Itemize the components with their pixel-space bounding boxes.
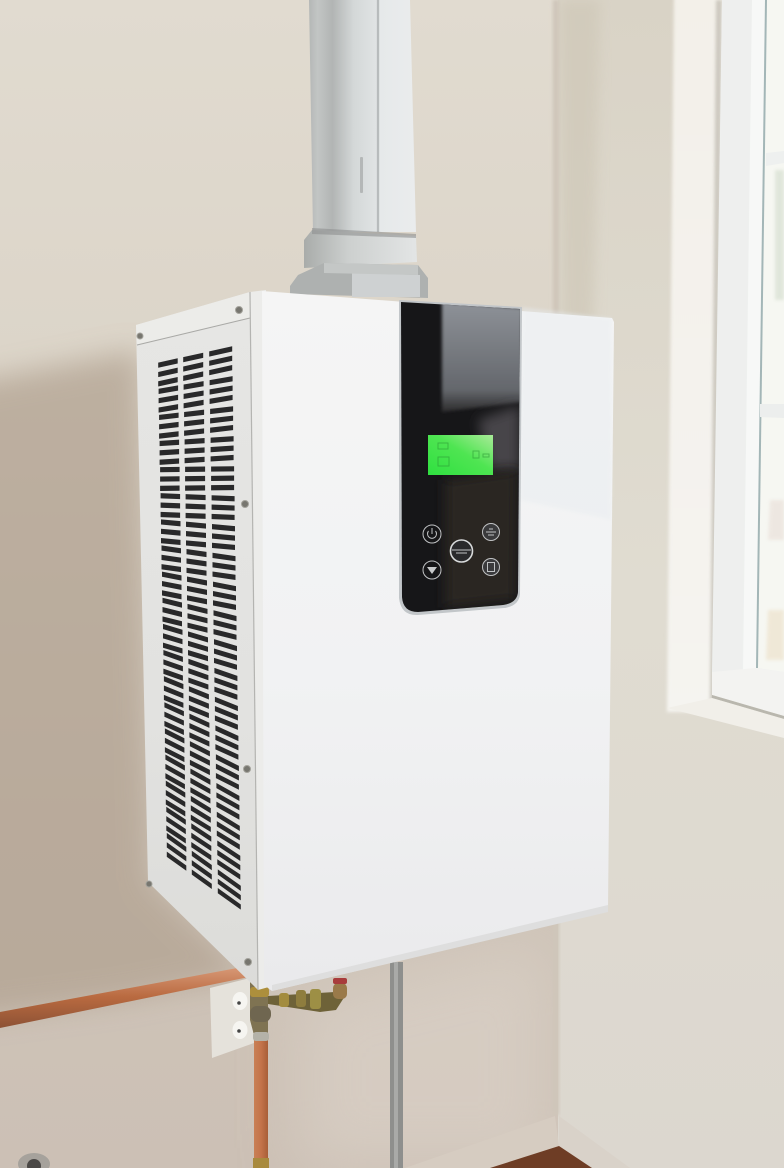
flue pipe (290, 0, 428, 298)
top strip of side panel (136, 292, 250, 345)
button: mode (482, 558, 500, 576)
window glass (757, 0, 784, 672)
LCD screen (428, 435, 493, 475)
button: power (423, 525, 441, 543)
button: centre (450, 540, 472, 562)
brass fittings (250, 976, 347, 1041)
vent slots (168, 349, 229, 906)
pipe label mark (360, 157, 363, 193)
panel: left wall (0, 0, 560, 1168)
panel: window frame and sill (667, 0, 784, 738)
wall shadow cast by heater (0, 350, 248, 1020)
flexible conduit (390, 962, 403, 1168)
wall ledge (667, 698, 784, 738)
display frame (399, 300, 522, 615)
panel: window reveal (667, 0, 724, 712)
side panel (136, 292, 258, 990)
faucet stub (18, 1153, 50, 1168)
glass reflection (442, 302, 522, 608)
panel: right wall (553, 0, 784, 1168)
sill trim (712, 668, 784, 716)
flue collar (304, 230, 417, 268)
button: menu (482, 524, 500, 540)
window muntins (766, 151, 784, 166)
screws (137, 306, 252, 966)
front face (262, 291, 614, 991)
copper pipe along wall (0, 966, 249, 1028)
side bevel strip (250, 290, 276, 990)
vertical copper gas line (253, 1040, 269, 1168)
outlet plate (210, 978, 254, 1058)
panel: control display (399, 300, 522, 615)
baseboard and floor (405, 1116, 630, 1168)
flue base (290, 263, 428, 298)
button: down (423, 561, 441, 579)
panel: water heater unit (136, 290, 614, 991)
